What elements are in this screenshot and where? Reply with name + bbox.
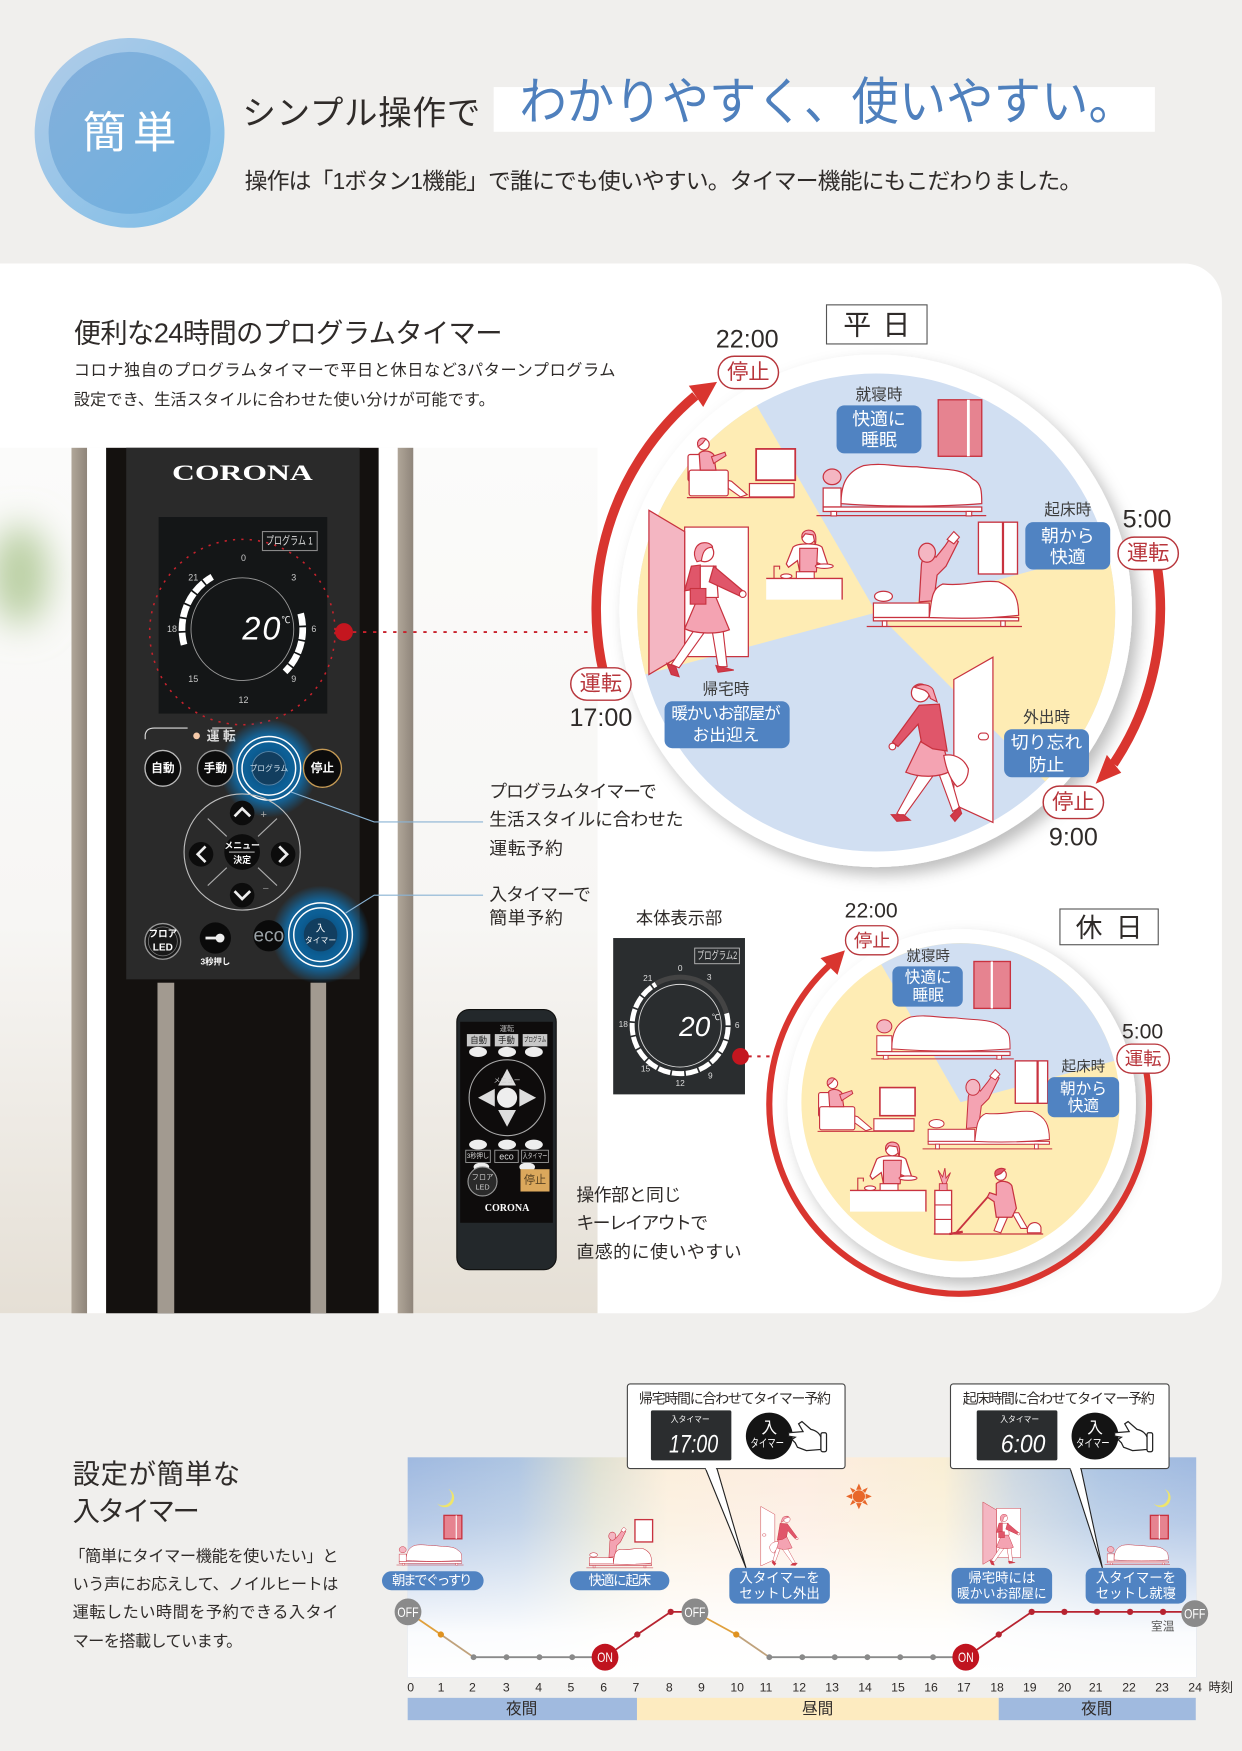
label: 本体表示部: 本体表示部 — [636, 908, 722, 928]
display: clock dial: 15 — [188, 674, 198, 684]
buttons row: bottom: 入 — [316, 924, 326, 935]
sky gradient background — [408, 1457, 1196, 1677]
callout leader lines — [290, 792, 483, 913]
text: on timer description — [69, 1548, 338, 1651]
band: night / day: 昼間 — [802, 1701, 833, 1718]
marker: ON 6h — [592, 1644, 618, 1671]
illustration: leaving — [761, 1506, 798, 1566]
label: 起床時: 朝から — [1041, 526, 1095, 546]
pill: set and go out — [729, 1568, 830, 1604]
label: 就寝時: 快適に — [905, 969, 952, 987]
pill: 快適に起床: 快適に起床 — [589, 1573, 651, 1588]
hour axis: 14 — [858, 1680, 872, 1694]
label: 起床時: 起床時 — [1044, 501, 1092, 519]
buttons row: bottom: フロア — [149, 929, 178, 940]
main title — [242, 59, 1155, 134]
display: holiday dial: 9 — [708, 1070, 713, 1080]
display: clock dial: 21 — [188, 572, 198, 582]
hour axis: 23 — [1155, 1680, 1169, 1694]
time: 9:00 stop: 9:00 — [1049, 824, 1098, 852]
buttons row: bottom — [145, 903, 352, 967]
text: remote description — [576, 1185, 742, 1262]
illustration: leaving home — [889, 657, 993, 822]
callout: return time timer: タイマー — [751, 1437, 784, 1450]
illustration: cooking — [850, 1142, 926, 1212]
badge: 簡単 — [35, 38, 224, 228]
label box: 平日 — [827, 305, 927, 344]
label: 起床時: 朝から — [1060, 1080, 1107, 1098]
marker: OFF 24h: OFF — [1184, 1606, 1205, 1622]
band: night / day — [408, 1698, 1196, 1720]
callout: program timer — [489, 782, 684, 859]
remote control: CORONA — [485, 1203, 530, 1214]
label: 就寝時: 就寝時 — [906, 948, 950, 965]
icon: moon left — [437, 1489, 454, 1507]
label box: 平日: 平 日 — [843, 309, 910, 340]
remote control: eco — [499, 1151, 514, 1161]
hour axis: 21 — [1089, 1680, 1103, 1694]
illustration: watching TV — [818, 1078, 915, 1131]
remote control: 手動 — [498, 1035, 515, 1045]
label box: 休日 — [1060, 909, 1158, 945]
pill: 快適に起床 — [570, 1571, 669, 1590]
hour axis: 18 — [990, 1680, 1004, 1694]
buttons row: bottom: タイマー — [305, 936, 336, 945]
pill: set and sleep: セットし就寝 — [1096, 1586, 1176, 1601]
hour axis: 10 — [730, 1680, 744, 1694]
callout: return time timer: 入タイマー — [671, 1415, 710, 1424]
callout: program timer: プログラムタイマーで — [489, 782, 657, 802]
buttons row: mode — [145, 736, 341, 800]
label: 就寝時 — [837, 386, 921, 453]
hour axis: 13 — [825, 1680, 839, 1694]
time: 5:00 run: 5:00 — [1123, 505, 1172, 533]
remote control: LED — [475, 1183, 490, 1192]
hour axis: 9 — [698, 1680, 705, 1694]
label: room temperature: 室温 — [1151, 1620, 1175, 1634]
heading: on timer — [73, 1459, 240, 1526]
display: clock dial: 18 — [167, 624, 177, 634]
display: holiday dial: 6 — [735, 1020, 740, 1030]
hour axis: 16 — [924, 1680, 938, 1694]
display: clock dial — [150, 517, 335, 725]
pill: 朝までぐっすり: 朝までぐっすり — [392, 1573, 472, 1588]
label: 起床時: 起床時 — [1062, 1059, 1105, 1076]
heading: on timer: 設定が簡単な — [73, 1459, 240, 1490]
hour axis: 4 — [535, 1680, 542, 1694]
display: clock dial: ℃ — [281, 615, 290, 625]
hour axis: 24 — [1188, 1680, 1202, 1694]
data points — [438, 1609, 1166, 1660]
buttons row: mode: プログラム — [249, 763, 288, 773]
marker: ON 17h — [952, 1644, 979, 1671]
illustration: vacuuming — [934, 1168, 1043, 1234]
display: clock dial: 12 — [239, 695, 248, 705]
callout: return time timer: 入 — [762, 1420, 778, 1437]
illustration: sleeping — [816, 400, 986, 516]
heading: on timer: 入タイマー — [73, 1495, 200, 1526]
marker: OFF 0h: OFF — [397, 1604, 419, 1620]
time: 17:00 run: 17:00 — [569, 704, 632, 732]
callout: return time timer — [627, 1384, 845, 1568]
buttons row: mode: 手動 — [204, 761, 227, 775]
label: 起床時 — [1048, 1059, 1119, 1117]
display: holiday dial: 20 — [678, 1011, 711, 1042]
hour axis: 2 — [469, 1680, 476, 1694]
remote control: プログラム — [524, 1035, 546, 1044]
illustration: sleeping left — [397, 1515, 464, 1565]
chart: holiday schedule — [769, 900, 1169, 1294]
glow: on-timer button — [271, 886, 370, 984]
time: 17:00 run — [569, 668, 632, 732]
remote control: 3秒押し — [467, 1151, 489, 1160]
label: 帰宅時 — [665, 681, 790, 748]
label: 起床時 — [1025, 501, 1110, 570]
illustration: watching TV — [687, 438, 795, 498]
remote control: 停止 — [524, 1173, 546, 1186]
control: direction pad: − — [263, 883, 269, 895]
display: holiday dial: 15 — [641, 1064, 651, 1074]
time: 22:00 stop: 22:00 — [845, 900, 898, 923]
buttons row: mode: 自動 — [151, 761, 175, 775]
time: 22:00 stop: 停止 — [727, 360, 770, 384]
display: clock dial: 9 — [291, 674, 296, 684]
remote control: 自動 — [470, 1035, 487, 1045]
buttons row: bottom: 3秒押し — [200, 956, 230, 966]
chart: daily timeline — [382, 1384, 1233, 1720]
display: clock dial: 6 — [311, 624, 316, 634]
buttons row: mode: 停止 — [311, 761, 334, 775]
time: 22:00 stop: 停止 — [854, 930, 891, 951]
hour axis — [407, 1680, 1233, 1694]
remote control: メニュー — [494, 1077, 520, 1084]
display: holiday dial: 12 — [676, 1078, 685, 1088]
text: on timer description: 「簡単にタイマー機能を使いたい」と — [69, 1548, 338, 1566]
arrow: evening run — [596, 382, 717, 684]
pill: set and go out: 入タイマーを — [739, 1570, 820, 1585]
illustration: waking up — [586, 1520, 653, 1568]
hour axis: 12 — [792, 1680, 806, 1694]
display: holiday dial: プログラム2 — [697, 949, 737, 962]
display: clock dial: プログラム 1 — [266, 534, 313, 548]
callout: program timer: 運転予約 — [489, 839, 563, 859]
pill: warm room on return: 帰宅時には — [968, 1569, 1035, 1585]
time: 9:00 stop: 停止 — [1052, 790, 1095, 814]
text: on timer description: 運転したい時間を予約できる入タイ — [73, 1604, 338, 1622]
label: 運転: 運転 — [207, 728, 236, 743]
logo: CORONA: CORONA — [172, 460, 313, 485]
display: holiday dial: ℃ — [712, 1013, 720, 1022]
glow: program button — [220, 719, 318, 817]
illustration: returning home — [649, 510, 748, 677]
time: 22:00 stop: 22:00 — [716, 325, 779, 353]
pill: warm room on return — [952, 1568, 1052, 1604]
remote control: 入タイマー — [523, 1151, 547, 1160]
control: direction pad: メニュー — [224, 840, 260, 850]
pill: set and sleep — [1086, 1568, 1186, 1604]
display: clock dial: 0 — [241, 553, 246, 563]
display: holiday dial: 3 — [707, 972, 712, 982]
buttons row: bottom: LED — [153, 943, 173, 954]
callout: on timer: 入タイマーで — [489, 884, 591, 904]
main title: シンプル操作で — [242, 95, 480, 132]
hour axis: 6 — [600, 1680, 607, 1694]
temperature line — [408, 1612, 1195, 1657]
text: program timer description — [74, 362, 615, 409]
hour axis: 17 — [957, 1680, 971, 1694]
hour axis: 3 — [503, 1680, 510, 1694]
display: holiday dial: 0 — [678, 963, 683, 973]
pill: 朝までぐっすり — [382, 1571, 484, 1590]
arrow: all-day run — [769, 950, 1149, 1294]
display: clock dial: 20 — [241, 611, 280, 647]
text: on timer description: マーを搭載しています。 — [73, 1633, 242, 1651]
label: 帰宅時: 暖かいお部屋が — [671, 704, 781, 723]
hour axis: 5 — [568, 1680, 575, 1694]
control: direction pad: + — [260, 809, 267, 821]
arrow: morning run — [1096, 539, 1160, 784]
band: night / day: 夜間 — [1081, 1700, 1112, 1718]
photo: heater control panel — [0, 448, 598, 1313]
hour axis: 1 — [438, 1680, 445, 1694]
hour axis: 8 — [666, 1680, 673, 1694]
time: 22:00 stop — [716, 325, 779, 389]
text: on timer description: いう声にお応えして、ノイルヒートは — [73, 1576, 338, 1594]
remote control: 運転 — [500, 1024, 514, 1033]
label: 起床時: 快適 — [1050, 547, 1086, 567]
pill: set and go out: セットし外出 — [739, 1586, 820, 1601]
pill: warm room on return: 暖かいお部屋に — [957, 1586, 1047, 1601]
callout: return time timer: 17:00 — [669, 1432, 718, 1459]
buttons row: bottom: eco — [254, 925, 284, 946]
label: 起床時: 快適 — [1068, 1097, 1099, 1115]
remote control — [457, 1010, 556, 1270]
hour axis: 20 — [1058, 1680, 1071, 1694]
time: 5:00 run: 運転 — [1127, 541, 1169, 565]
illustration: waking up — [923, 1061, 1052, 1149]
control: direction pad — [184, 794, 300, 910]
hour axis: 7 — [633, 1680, 640, 1694]
subtitle: 操作は「1ボタン1機能」で誰にでも使いやすい。タイマー機能にもこだわりました。 — [245, 168, 1082, 194]
label: 外出時: 外出時 — [1023, 709, 1070, 727]
label box: 休日: 休 日 — [1076, 913, 1143, 943]
heading: program timer: 便利な24時間のプログラムタイマー — [74, 317, 503, 348]
label: 外出時: 切り忘れ — [1011, 733, 1082, 753]
label: 就寝時: 就寝時 — [856, 386, 903, 404]
text: program timer description: 設定でき、生活スタイルに合わせた使い分けが可能です。 — [74, 391, 495, 409]
illustration: waking up — [867, 522, 1022, 626]
main title: わかりやすく、使いやすい。 — [519, 59, 1136, 134]
callout: return time timer: 帰宅時間に合わせてタイマー予約 — [639, 1391, 831, 1407]
illustration: sleeping right — [1105, 1515, 1170, 1565]
text: remote description: 直感的に使いやすい — [576, 1242, 742, 1262]
illustration: returning — [983, 1502, 1021, 1565]
hour axis: 19 — [1023, 1680, 1037, 1694]
remote control: フロア — [472, 1173, 493, 1182]
text: remote description: キーレイアウトで — [576, 1213, 708, 1233]
chart: weekday schedule — [569, 305, 1178, 867]
hour axis: 時刻 — [1209, 1680, 1233, 1694]
hour axis: 11 — [760, 1680, 773, 1694]
badge: 簡単: 簡単 — [83, 110, 176, 158]
display: holiday dial — [613, 938, 745, 1094]
hour axis: 22 — [1122, 1680, 1136, 1694]
display: holiday dial: 18 — [619, 1019, 628, 1029]
time: 9:00 stop — [1043, 786, 1104, 852]
callout: on timer: 簡単予約 — [489, 908, 563, 928]
marker: OFF 9h: OFF — [684, 1604, 706, 1620]
time: 22:00 stop — [845, 900, 898, 955]
icon: sun — [846, 1484, 872, 1509]
label: 就寝時: 睡眠 — [913, 987, 944, 1005]
callout: on timer — [489, 884, 591, 928]
label: 外出時: 防止 — [1029, 755, 1064, 775]
callout: wake time timer: 入 — [1087, 1420, 1103, 1437]
callout: program timer: 生活スタイルに合わせた — [489, 810, 684, 830]
icon: moon right — [1154, 1489, 1171, 1507]
marker: OFF 9h — [682, 1598, 708, 1625]
callout: wake time timer: 入タイマー — [1000, 1415, 1039, 1424]
label: 帰宅時: 帰宅時 — [703, 681, 750, 699]
time: 5:00 run — [1117, 1020, 1169, 1073]
time: 5:00 run — [1118, 505, 1178, 570]
label: 帰宅時: お出迎え — [692, 725, 760, 744]
label: 就寝時: 快適に — [852, 409, 906, 429]
label: 就寝時: 睡眠 — [861, 430, 897, 450]
display: holiday dial: 21 — [643, 973, 653, 983]
hour axis: 15 — [891, 1680, 905, 1694]
illustration: cooking — [766, 530, 842, 600]
marker: ON 17h: ON — [958, 1649, 974, 1665]
time: 5:00 run: 運転 — [1125, 1048, 1162, 1069]
dotted connector: display to holiday — [732, 1048, 773, 1065]
display: clock dial: 3 — [291, 572, 296, 582]
time: 17:00 run: 運転 — [580, 671, 622, 695]
control: direction pad: 決定 — [233, 854, 251, 865]
callout: wake time timer: 起床時間に合わせてタイマー予約 — [963, 1391, 1155, 1407]
time: 5:00 run: 5:00 — [1122, 1020, 1163, 1043]
label: 外出時 — [1004, 709, 1089, 777]
band: night / day: 夜間 — [506, 1700, 537, 1718]
panel: program timer — [0, 264, 1222, 1313]
dotted connector: panel to weekday — [335, 623, 592, 641]
marker: OFF 0h — [395, 1598, 421, 1625]
marker: OFF 24h — [1181, 1600, 1208, 1627]
label: 運転 — [145, 728, 236, 743]
label: 就寝時 — [892, 948, 963, 1007]
text: program timer description: コロナ独自のプログラムタイマーで平日と休日など3パターンプログラム — [74, 362, 615, 380]
marker: ON 6h: ON — [597, 1649, 613, 1665]
hour axis: 0 — [407, 1680, 414, 1694]
callout: wake time timer: 6:00 — [1001, 1432, 1046, 1459]
callout: wake time timer: タイマー — [1076, 1437, 1110, 1450]
text: remote description: 操作部と同じ — [576, 1185, 681, 1205]
callout: wake time timer — [950, 1384, 1169, 1568]
illustration: sleeping — [871, 961, 1014, 1059]
pill: set and sleep: 入タイマーを — [1096, 1570, 1176, 1585]
